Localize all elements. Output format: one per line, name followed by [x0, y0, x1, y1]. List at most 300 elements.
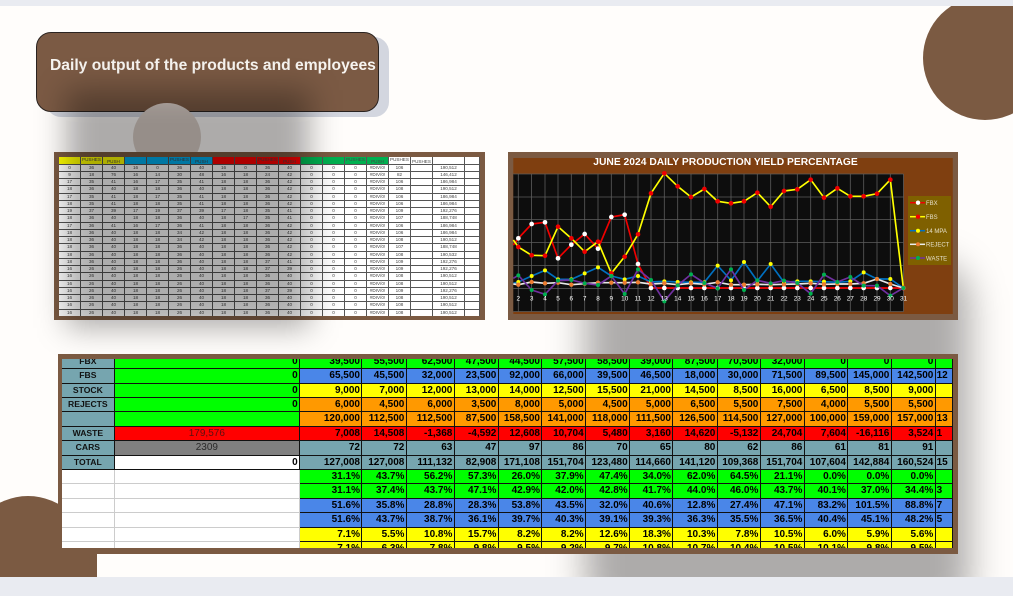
- spreadsheet data rows: 0: [332, 186, 335, 191]
- spreadsheet data rows: 18: [221, 194, 226, 199]
- row: STOCK: 16,000: [772, 385, 802, 396]
- spreadsheet data rows: 17: [243, 215, 248, 220]
- row: STOCK: 15,500: [597, 385, 628, 396]
- spreadsheet data rows: 0: [310, 223, 313, 228]
- row: CARS: 86: [791, 442, 802, 453]
- spreadsheet data rows: 186,984: [440, 201, 457, 206]
- row: FBS: 12: [937, 370, 948, 381]
- spreadsheet data rows: 0: [332, 237, 335, 242]
- spreadsheet data rows: 106: [396, 194, 403, 199]
- row: REJECTS: 5,500: [733, 399, 758, 410]
- spreadsheet data rows: 40: [287, 310, 292, 315]
- row: REJECTS: [62, 398, 953, 412]
- spreadsheet data rows: 0: [310, 281, 313, 286]
- spreadsheet data rows: 18: [155, 230, 160, 235]
- spreadsheet data rows: 24: [265, 172, 270, 177]
- spreadsheet data rows: 48: [199, 172, 204, 177]
- row: STOCK: 6,500: [821, 385, 846, 396]
- spreadsheet data rows: 42: [287, 172, 292, 177]
- spreadsheet data rows: 0: [332, 266, 335, 271]
- spreadsheet data rows: 0: [332, 244, 335, 249]
- spreadsheet data rows: 0: [156, 165, 159, 170]
- panel: production table: [58, 354, 958, 554]
- spreadsheet data rows: 37: [177, 208, 182, 213]
- spreadsheet data rows: 36: [265, 273, 270, 278]
- spreadsheet data rows: 40: [199, 281, 204, 286]
- spreadsheet data rows: 17: [155, 194, 160, 199]
- spreadsheet data rows: 18: [133, 310, 138, 315]
- x axis day labels: 8: [596, 296, 600, 302]
- row: subtotal: 157,000: [897, 413, 933, 424]
- spreadsheet data rows: 41: [111, 194, 116, 199]
- spreadsheet data rows: 40: [111, 215, 116, 220]
- row: WASTE: 14,620: [685, 428, 715, 439]
- row: TOTAL: 127,008: [368, 457, 404, 468]
- spreadsheet data rows: 36: [265, 237, 270, 242]
- row: CARS: 65: [660, 442, 671, 453]
- spreadsheet data rows: 18: [67, 237, 72, 242]
- spreadsheet data rows: 36: [89, 252, 94, 257]
- spreadsheet data rows: 109: [396, 208, 403, 213]
- row: WASTE: 24,704: [772, 428, 802, 439]
- title banner: [36, 32, 379, 112]
- spreadsheet data rows: 17: [155, 223, 160, 228]
- row: TOTAL: 0: [292, 457, 298, 468]
- spreadsheet data rows: 0: [332, 223, 335, 228]
- spreadsheet data rows: #DIV/0!: [370, 252, 385, 257]
- spreadsheet data rows: 19: [155, 208, 160, 213]
- spreadsheet data rows: 16: [133, 179, 138, 184]
- x axis day labels: 17: [714, 296, 722, 302]
- row: FBS percentage: 88.8%: [905, 500, 933, 511]
- chart frame: [508, 152, 958, 320]
- spreadsheet data rows: 18: [155, 302, 160, 307]
- spreadsheet data rows: #DIV/0!: [370, 215, 385, 220]
- row: FBS percentage: 101.5%: [855, 500, 889, 511]
- spreadsheet data rows: 18: [133, 273, 138, 278]
- row: subtotal: 120,000: [324, 413, 360, 424]
- spreadsheet data rows: 108: [396, 252, 403, 257]
- row: CARS: CARS: [76, 442, 100, 452]
- spreadsheet data rows: 41: [199, 194, 204, 199]
- spreadsheet data rows: 39: [287, 288, 292, 293]
- row: REJECTS: 5,000: [559, 399, 584, 410]
- row: subtotal: 141,000: [548, 413, 584, 424]
- row: FBX average percentage: 40.1%: [818, 485, 846, 496]
- row: WASTE: -5,132: [730, 428, 758, 439]
- row: REJECTS: 6,000: [427, 399, 452, 410]
- row: FBX percentage: 26.0%: [512, 471, 540, 482]
- spreadsheet data rows: 16: [67, 266, 72, 271]
- row: FBS: 23,500: [466, 370, 496, 381]
- spreadsheet data rows: 0: [354, 186, 357, 191]
- spreadsheet data rows: 0: [310, 201, 313, 206]
- spreadsheet data rows: #DIV/0!: [370, 237, 385, 242]
- spreadsheet data rows: 36: [265, 194, 270, 199]
- row: TOTAL: [62, 456, 953, 470]
- spreadsheet data rows: 0: [310, 310, 313, 315]
- spreadsheet data rows: 18: [133, 288, 138, 293]
- row: FBX percentage: 34.0%: [643, 471, 671, 482]
- spreadsheet data rows: 42: [287, 244, 292, 249]
- x axis day labels: 3: [530, 296, 534, 302]
- spreadsheet data rows: 0: [354, 288, 357, 293]
- row: stock percentage: 8.2%: [561, 529, 584, 540]
- spreadsheet data rows: 36: [265, 252, 270, 257]
- spreadsheet data rows: 18: [133, 252, 138, 257]
- spreadsheet data rows: 17: [67, 179, 72, 184]
- row: FBX: [62, 359, 953, 369]
- spreadsheet data rows: 26: [89, 273, 94, 278]
- row: FBX average percentage: 41.7%: [643, 485, 671, 496]
- spreadsheet data rows: 37: [265, 259, 270, 264]
- spreadsheet data rows: 82: [397, 172, 402, 177]
- row: FBX average percentage: 44.0%: [687, 485, 715, 496]
- spreadsheet data rows: 109: [396, 288, 403, 293]
- spreadsheet data rows: [59, 165, 480, 316]
- spreadsheet data rows: 192,276: [440, 259, 457, 264]
- spreadsheet data rows: #DIV/0!: [370, 302, 385, 307]
- spreadsheet data rows: 186,984: [440, 194, 457, 199]
- row: FBS: 66,000: [553, 370, 584, 381]
- spreadsheet data rows: 18: [221, 215, 226, 220]
- spreadsheet data rows: 190,512: [440, 273, 457, 278]
- row: FBS average percentage: 35.5%: [730, 514, 758, 525]
- row: FBS percentage: 53.8%: [512, 500, 540, 511]
- spreadsheet data rows: 0: [332, 172, 335, 177]
- chart legend: FBX: [926, 201, 938, 207]
- spreadsheet data rows: 39: [111, 208, 116, 213]
- spreadsheet data rows: 108: [396, 302, 403, 307]
- row: FBX percentage: 47.4%: [599, 471, 628, 482]
- row: STOCK: 14,500: [685, 385, 715, 396]
- spreadsheet data rows: 0: [310, 215, 313, 220]
- row: REJECTS: 8,000: [515, 399, 540, 410]
- row: FBX average percentage: 42.8%: [599, 485, 628, 496]
- row: FBX average percentage: 37.0%: [861, 485, 889, 496]
- spreadsheet data rows: 106: [396, 223, 403, 228]
- x axis day labels: 10: [621, 296, 629, 302]
- spreadsheet data rows: 106: [396, 201, 403, 206]
- spreadsheet data rows: 40: [111, 230, 116, 235]
- x axis day labels: 4: [543, 296, 547, 302]
- spreadsheet data rows: 188,748: [440, 244, 457, 249]
- row: TOTAL: 160,524: [897, 457, 933, 468]
- spreadsheet data rows: 186,984: [440, 223, 457, 228]
- row: FBX average percentage: 42.9%: [512, 485, 540, 496]
- spreadsheet data rows: 40: [111, 165, 116, 170]
- row: FBX average percentage: [62, 484, 953, 499]
- spreadsheet data rows: 0: [332, 194, 335, 199]
- spreadsheet header row: PUSH: [107, 159, 120, 164]
- spreadsheet data rows: 16: [133, 223, 138, 228]
- x axis day labels: 26: [834, 296, 841, 302]
- spreadsheet data rows: 18: [67, 186, 72, 191]
- spreadsheet data rows: 40: [199, 288, 204, 293]
- row: FBS average percentage: 51.6%: [332, 514, 360, 525]
- spreadsheet data rows: 18: [221, 179, 226, 184]
- spreadsheet data rows: 40: [111, 302, 116, 307]
- spreadsheet data rows: 18: [67, 230, 72, 235]
- spreadsheet data rows: 190,532: [440, 252, 457, 257]
- row: WASTE: 3,160: [646, 428, 671, 439]
- spreadsheet data rows: 36: [265, 165, 270, 170]
- row: REJECTS: 3,500: [471, 399, 496, 410]
- spreadsheet data rows: 0: [332, 288, 335, 293]
- spreadsheet header row: PUSHES: [82, 157, 101, 162]
- spreadsheet data rows: 0: [354, 281, 357, 286]
- spreadsheet data rows: 36: [265, 186, 270, 191]
- x axis day labels: 14: [674, 296, 682, 302]
- spreadsheet data rows: 18: [133, 259, 138, 264]
- row: subtotal: 159,000: [853, 413, 889, 424]
- row: STOCK: 12,500: [553, 385, 584, 396]
- spreadsheet data rows: 18: [133, 201, 138, 206]
- spreadsheet data rows: 16: [133, 165, 138, 170]
- spreadsheet data rows: 0: [354, 208, 357, 213]
- row: CARS: 97: [529, 442, 540, 453]
- spreadsheet data rows: 106: [396, 230, 403, 235]
- spreadsheet data rows: 0: [332, 215, 335, 220]
- spreadsheet data rows: #DIV/0!: [370, 223, 385, 228]
- row: TOTAL: 151,704: [766, 457, 802, 468]
- x axis day labels: 6: [570, 296, 574, 302]
- spreadsheet data rows: 36: [89, 230, 94, 235]
- row: TOTAL: 123,480: [592, 457, 628, 468]
- spreadsheet data rows: 16: [67, 281, 72, 286]
- spreadsheet data rows: 40: [199, 165, 204, 170]
- spreadsheet data rows: 0: [354, 201, 357, 206]
- spreadsheet data rows: 26: [177, 310, 182, 315]
- spreadsheet data rows: 41: [287, 259, 292, 264]
- row: STOCK: 12,000: [422, 385, 452, 396]
- spreadsheet data rows: 16: [67, 302, 72, 307]
- spreadsheet data rows: 18: [243, 295, 248, 300]
- row: FBX average percentage: 37.4%: [376, 485, 404, 496]
- spreadsheet data rows: 42: [287, 201, 292, 206]
- spreadsheet data rows: 17: [133, 208, 138, 213]
- spreadsheet header row: PUSH: [283, 159, 296, 164]
- spreadsheet data rows: 18: [243, 281, 248, 286]
- row: STOCK: 8,500: [733, 385, 758, 396]
- spreadsheet data rows: 36: [265, 295, 270, 300]
- row: FBS average percentage: 5: [937, 514, 942, 525]
- spreadsheet data rows: 18: [221, 273, 226, 278]
- spreadsheet data rows: #DIV/0!: [370, 281, 385, 286]
- spreadsheet data rows: 39: [199, 208, 204, 213]
- spreadsheet data rows: 16: [67, 295, 72, 300]
- row: REJECTS: 7,500: [777, 399, 802, 410]
- row: FBS: 45,500: [374, 370, 404, 381]
- row: FBS: 65,500: [329, 370, 360, 381]
- spreadsheet data rows: 18: [67, 215, 72, 220]
- row: STOCK: 21,000: [640, 385, 671, 396]
- row: REJECTS: 5,500: [908, 399, 933, 410]
- spreadsheet data rows: #DIV/0!: [370, 186, 385, 191]
- spreadsheet header row: PUSH: [195, 159, 208, 164]
- spreadsheet data rows: 40: [199, 186, 204, 191]
- spreadsheet data rows: 16: [67, 273, 72, 278]
- soft shadow behind production table: [585, 262, 970, 596]
- row: stock percentage: 5.6%: [911, 529, 933, 540]
- spreadsheet header row: [59, 157, 480, 165]
- spreadsheet data rows: 18: [133, 186, 138, 191]
- spreadsheet data rows: 9: [68, 172, 71, 177]
- x axis day labels: 25: [820, 296, 828, 302]
- spreadsheet data rows: 40: [111, 310, 116, 315]
- spreadsheet data rows: 18: [221, 237, 226, 242]
- spreadsheet data rows: #DIV/0!: [370, 310, 385, 315]
- spreadsheet data rows: 0: [354, 302, 357, 307]
- spreadsheet data rows: 0: [332, 302, 335, 307]
- row: TOTAL: 107,604: [810, 457, 846, 468]
- spreadsheet data rows: 18: [133, 194, 138, 199]
- row: FBS percentage: 28.3%: [468, 500, 496, 511]
- spreadsheet data rows: 18: [133, 302, 138, 307]
- spreadsheet data rows: #DIV/0!: [370, 172, 385, 177]
- spreadsheet data rows: 0: [310, 208, 313, 213]
- spreadsheet data rows: 17: [155, 179, 160, 184]
- x axis day labels: 16: [701, 296, 708, 302]
- spreadsheet data rows: 18: [243, 208, 248, 213]
- row: FBS: 71,500: [772, 370, 802, 381]
- chart legend: FBS: [926, 215, 938, 221]
- row: FBX percentage: 56.2%: [424, 471, 452, 482]
- spreadsheet data rows: 40: [111, 273, 116, 278]
- spreadsheet data rows: 42: [287, 237, 292, 242]
- spreadsheet data rows: 190,512: [440, 310, 457, 315]
- spreadsheet data rows: 36: [265, 201, 270, 206]
- row: WASTE: 10,704: [553, 428, 584, 439]
- x axis day labels: 19: [740, 296, 748, 302]
- spreadsheet data rows: 18: [243, 244, 248, 249]
- spreadsheet data rows: 35: [265, 215, 270, 220]
- spreadsheet data rows: #DIV/0!: [370, 194, 385, 199]
- row: STOCK: STOCK: [73, 385, 103, 395]
- spreadsheet data rows: 18: [155, 295, 160, 300]
- spreadsheet data rows: 0: [332, 295, 335, 300]
- spreadsheet data rows: 26: [177, 266, 182, 271]
- spreadsheet data rows: 26: [177, 273, 182, 278]
- row: stock percentage: 5.9%: [867, 529, 889, 540]
- spreadsheet data rows: 18: [221, 223, 226, 228]
- spreadsheet data rows: 0: [354, 259, 357, 264]
- spreadsheet data rows: 26: [177, 288, 182, 293]
- spreadsheet data rows: 41: [199, 201, 204, 206]
- spreadsheet data rows: 26: [89, 266, 94, 271]
- spreadsheet data rows: 0: [354, 237, 357, 242]
- x axis day labels: 24: [807, 296, 815, 302]
- x axis day labels: [517, 296, 907, 302]
- row: REJECTS: 4,500: [379, 399, 404, 410]
- spreadsheet data rows: 40: [111, 237, 116, 242]
- spreadsheet data rows: #DIV/0!: [370, 295, 385, 300]
- row: FBS percentage: 7: [937, 500, 942, 511]
- x axis day labels: 30: [887, 296, 894, 302]
- spreadsheet data rows: 40: [287, 302, 292, 307]
- row: FBX average percentage: 43.7%: [774, 485, 802, 496]
- row: STOCK: 8,500: [864, 385, 889, 396]
- row: REJECTS: REJECTS: [68, 399, 108, 409]
- spreadsheet data rows: 18: [221, 230, 226, 235]
- spreadsheet data rows: 34: [177, 230, 182, 235]
- x axis day labels: 31: [900, 296, 907, 302]
- spreadsheet data rows: 16: [67, 310, 72, 315]
- chart legend: 14 MPA: [926, 229, 947, 235]
- row: FBS average percentage: 43.7%: [376, 514, 404, 525]
- row: CARS: 63: [441, 442, 452, 453]
- row: stock percentage: 7.1%: [337, 529, 360, 540]
- chart background: [513, 158, 953, 314]
- row: stock percentage: 15.7%: [468, 529, 496, 540]
- title text: Daily output of the products and employees: [50, 56, 376, 74]
- row: STOCK: 13,000: [466, 385, 496, 396]
- spreadsheet data rows: 41: [111, 223, 116, 228]
- spreadsheet data rows: 16: [221, 172, 226, 177]
- decorative circle top right: [923, 0, 1013, 120]
- chart legend: [908, 196, 951, 265]
- spreadsheet data rows: 36: [265, 230, 270, 235]
- spreadsheet data rows: 109: [396, 266, 403, 271]
- spreadsheet data rows: 0: [332, 310, 335, 315]
- row: CARS: 61: [835, 442, 846, 453]
- row: TOTAL: 111,132: [417, 457, 452, 468]
- spreadsheet data rows: 18: [221, 310, 226, 315]
- spreadsheet data rows: 109: [396, 259, 403, 264]
- row: WASTE: 12,608: [509, 428, 540, 439]
- spreadsheet data rows: 18: [133, 215, 138, 220]
- spreadsheet data rows: 0: [354, 230, 357, 235]
- row: FBX average percentage: 31.1%: [332, 485, 360, 496]
- spreadsheet data rows: 146,412: [440, 172, 457, 177]
- spreadsheet data rows: 35: [177, 194, 182, 199]
- spreadsheet data rows: 35: [89, 194, 94, 199]
- spreadsheet data rows: 18: [155, 252, 160, 257]
- row: stock percentage: 10.8%: [424, 529, 452, 540]
- spreadsheet data rows: 0: [332, 179, 335, 184]
- spreadsheet data rows: #DIV/0!: [370, 165, 385, 170]
- spreadsheet data rows: 40: [111, 266, 116, 271]
- series: 14 MPA: [513, 262, 903, 288]
- row: stock percentage: 7.8%: [736, 529, 758, 540]
- spreadsheet data rows: 192,276: [440, 208, 457, 213]
- spreadsheet data rows: 0: [354, 172, 357, 177]
- spreadsheet data rows: 40: [199, 310, 204, 315]
- spreadsheet data rows: 18: [221, 252, 226, 257]
- row: WASTE: WASTE: [73, 428, 103, 438]
- spreadsheet data rows: 40: [199, 266, 204, 271]
- spreadsheet header row: PUSHES: [346, 157, 365, 162]
- row: FBX percentage: 31.1%: [332, 471, 360, 482]
- spreadsheet data rows: 18: [221, 295, 226, 300]
- spreadsheet data rows: 40: [199, 252, 204, 257]
- spreadsheet header row: PUSHES: [258, 157, 277, 162]
- chart legend: REJECT: [926, 243, 950, 249]
- spreadsheet data rows: 35: [265, 208, 270, 213]
- spreadsheet data rows: 0: [354, 244, 357, 249]
- spreadsheet data rows: 18: [243, 237, 248, 242]
- x axis day labels: 9: [610, 296, 614, 302]
- row: FBS percentage: [62, 499, 953, 513]
- row: WASTE: -1,368: [424, 428, 452, 439]
- row: subtotal: 118,000: [592, 413, 628, 424]
- spreadsheet data rows: 36: [177, 165, 182, 170]
- row: FBS: 18,000: [685, 370, 715, 381]
- row: FBX percentage: 43.7%: [376, 471, 404, 482]
- spreadsheet data rows: 18: [243, 172, 248, 177]
- spreadsheet data rows: 18: [243, 273, 248, 278]
- spreadsheet data rows: 18: [243, 259, 248, 264]
